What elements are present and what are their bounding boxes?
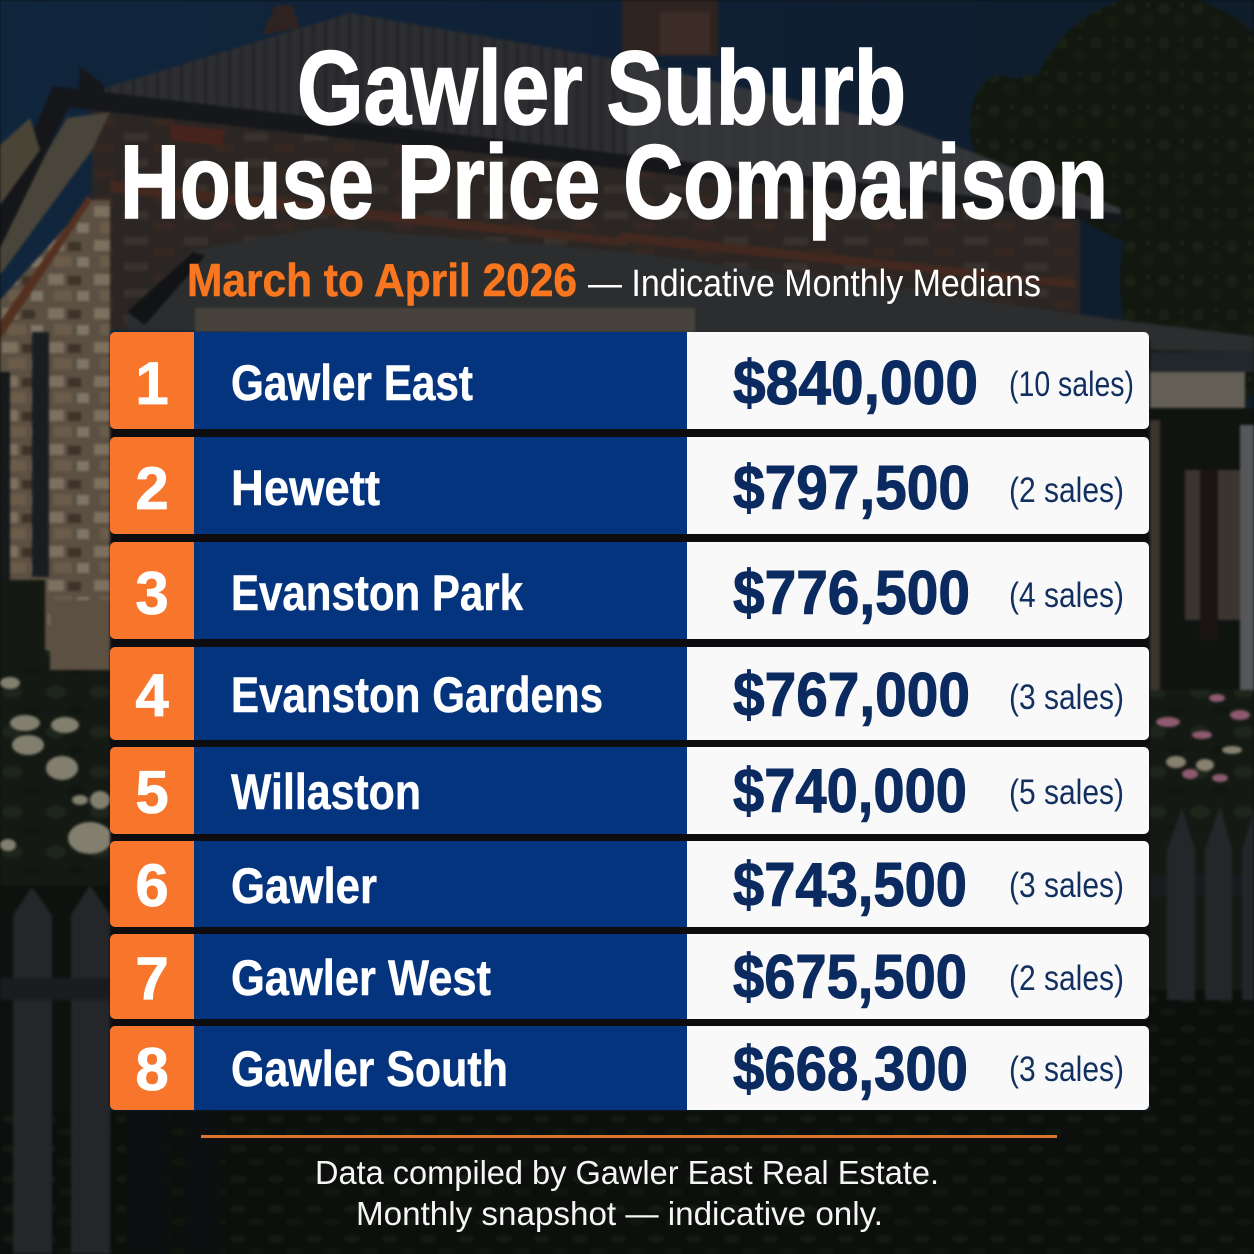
row 1: Gawler East (110, 332, 1149, 429)
picket fence right (1150, 806, 1254, 1000)
row 5: Willaston: (5 sales) (1009, 773, 1124, 812)
verandah roof (127, 227, 1254, 352)
subtitle: — Indicative Monthly Medians (588, 263, 1041, 305)
left fascia (0, 86, 75, 248)
row 1: Gawler East: Gawler East (231, 355, 473, 411)
upper wall (92, 110, 1080, 330)
picket fence left (0, 885, 220, 1254)
row 5: Willaston: $740,000 (733, 757, 967, 826)
row 3: Evanston Park (110, 542, 1149, 639)
footer note (315, 1154, 939, 1232)
title: Gawler Suburb (297, 30, 906, 147)
row 7: Gawler West: (2 sales) (1009, 959, 1124, 998)
row 8: Gawler South (110, 1026, 1149, 1110)
gable end (78, 66, 105, 92)
row 6: Gawler: Gawler (231, 858, 377, 914)
row 6: Gawler: 6 (135, 852, 169, 919)
subtitle (187, 254, 1041, 306)
lower dark foliage (0, 830, 1254, 1254)
row 5: Willaston: Willaston (231, 764, 421, 820)
left stone ruin in sky (0, 118, 40, 205)
row 3: Evanston Park: 3 (135, 560, 169, 627)
windows (0, 332, 49, 580)
row 6: Gawler: (3 sales) (1009, 866, 1124, 905)
footer note: Monthly snapshot — indicative only. (356, 1195, 883, 1232)
main roof (53, 13, 1122, 220)
row 8: Gawler South: 8 (135, 1036, 169, 1103)
row 6: Gawler: $743,500 (733, 851, 967, 920)
wall behind table (110, 340, 1150, 1105)
row 8: Gawler South: (3 sales) (1009, 1050, 1124, 1089)
rust bands on wall (110, 124, 1075, 288)
row 3: Evanston Park: Evanston Park (231, 565, 523, 621)
row 8: Gawler South: Gawler South (231, 1041, 508, 1097)
row 5: Willaston (110, 747, 1149, 834)
row 4: Evanston Gardens: $767,000 (733, 661, 970, 730)
footer note: Data compiled by Gawler East Real Estate. (315, 1154, 939, 1191)
row 4: Evanston Gardens: (3 sales) (1009, 678, 1124, 717)
flowers left (0, 580, 112, 890)
gutter (53, 86, 1122, 224)
row 7: Gawler West: 7 (135, 945, 169, 1012)
right garden under verandah (1149, 408, 1254, 705)
flowers right (1150, 690, 1254, 830)
row 2: Hewett: 2 (135, 455, 169, 522)
table: suburb ranking (110, 332, 1149, 1110)
row 5: Willaston: 5 (135, 759, 169, 826)
row 3: Evanston Park: (4 sales) (1009, 576, 1124, 615)
row 7: Gawler West: Gawler West (231, 950, 491, 1006)
row 2: Hewett: Hewett (231, 460, 380, 516)
row 4: Evanston Gardens (110, 647, 1149, 740)
verandah fretwork (195, 308, 1254, 408)
row 4: Evanston Gardens: Evanston Gardens (231, 667, 603, 723)
tree at right (970, 0, 1254, 410)
row 2: Hewett (110, 437, 1149, 534)
row 1: Gawler East: 1 (135, 350, 169, 417)
row 7: Gawler West: $675,500 (733, 943, 967, 1012)
row 1: Gawler East: (10 sales) (1009, 365, 1134, 404)
cream eaves (0, 112, 110, 275)
row 2: Hewett: $797,500 (733, 454, 970, 523)
title (120, 30, 1108, 241)
row 2: Hewett: (2 sales) (1009, 471, 1124, 510)
row 4: Evanston Gardens: 4 (135, 662, 169, 729)
row 1: Gawler East: $840,000 (733, 349, 978, 418)
stone wall left (0, 195, 110, 680)
row 6: Gawler (110, 841, 1149, 927)
row 8: Gawler South: $668,300 (733, 1035, 968, 1104)
row 3: Evanston Park: $776,500 (733, 559, 970, 628)
chimney (262, 0, 718, 56)
row 7: Gawler West (110, 934, 1149, 1019)
subtitle: March to April 2026 (187, 254, 577, 306)
